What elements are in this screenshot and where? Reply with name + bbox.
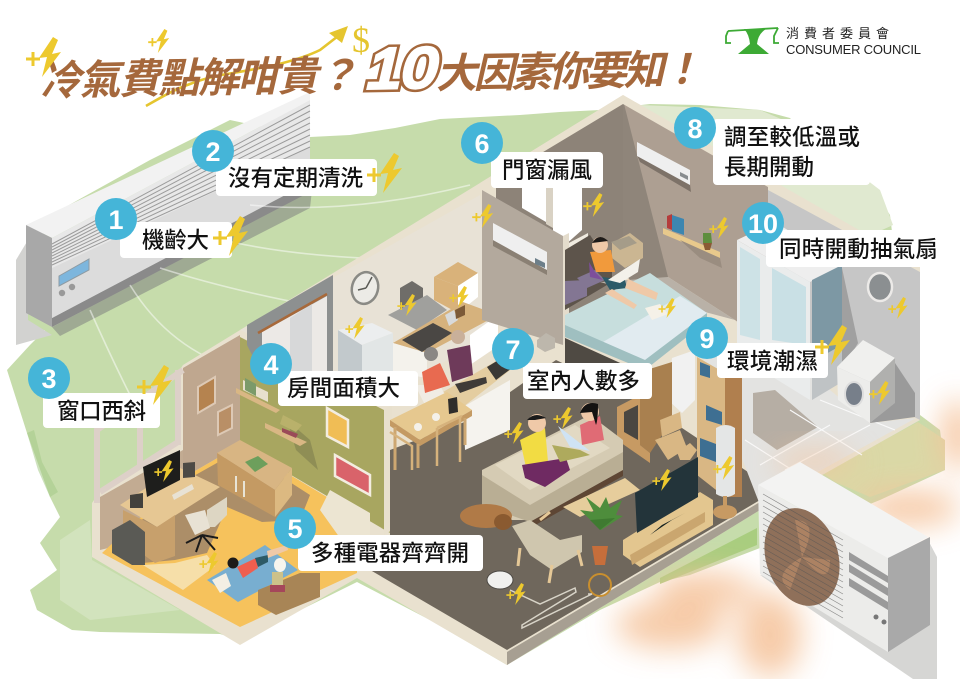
small air conditioners on bedroom walls — [493, 142, 691, 275]
title rising arrow and dollar sign: $ — [352, 20, 370, 60]
factor 8 label — [674, 107, 870, 185]
armchair — [512, 512, 582, 583]
factor 7 label: 7 — [505, 335, 521, 365]
title: 10 — [361, 37, 445, 101]
factor 5 label — [274, 507, 483, 571]
factor 4 label — [250, 343, 418, 406]
factor 8 label: 長期開動 — [724, 155, 814, 180]
factor 7 label — [492, 328, 652, 399]
kitchen dining table and couple — [390, 330, 487, 470]
kitchen window and appliances — [247, 262, 498, 378]
lightning icons — [26, 29, 908, 605]
factor 6 label: 門窗漏風 — [502, 158, 592, 183]
sofa with couple using devices — [482, 403, 623, 528]
consumer council logo — [726, 26, 921, 57]
room: study walls and window — [97, 335, 392, 627]
title rising arrow and dollar sign — [146, 20, 370, 106]
dog on the floor — [460, 504, 512, 530]
factor 3 label — [28, 357, 160, 428]
title: 大因素你要知！ — [434, 46, 711, 97]
bathroom — [668, 190, 920, 505]
haze over bathroom floor — [773, 448, 857, 476]
factor 9 label — [686, 317, 828, 378]
wall frames and shelves in study — [198, 377, 370, 495]
robot vacuum and cable — [487, 571, 592, 628]
wall outlet — [537, 333, 555, 352]
factor 8 label: 調至較低溫或 — [724, 125, 860, 150]
factor 5 label: 5 — [287, 514, 303, 544]
tv on cabinet — [623, 457, 713, 567]
coffee table — [563, 478, 640, 517]
house shell — [92, 95, 920, 665]
outdoor air conditioner unit — [752, 462, 937, 679]
bedroom shelf — [663, 214, 722, 268]
factor 5 label: 多種電器齊齊開 — [311, 541, 469, 566]
study furniture — [112, 440, 370, 615]
large indoor air conditioner — [16, 92, 312, 345]
main floor and kitchen counter — [365, 350, 760, 650]
factor 1 label: 1 — [108, 205, 124, 235]
title — [38, 20, 711, 106]
potted palm and stand — [580, 497, 623, 596]
bed with man and laptop — [565, 233, 735, 382]
factor 6 label — [461, 122, 603, 188]
bedroom walls — [480, 95, 920, 345]
orange hot air haze — [615, 399, 960, 677]
factor 10 label: 10 — [748, 209, 778, 239]
factor 10 label — [742, 202, 940, 267]
factor 2 label — [192, 130, 377, 196]
consumer council logo: CONSUMER COUNCIL — [786, 42, 921, 57]
factor 3 label: 3 — [41, 364, 57, 394]
cool air rays — [90, 185, 470, 470]
factor 6 label: 6 — [474, 129, 490, 159]
factor 3 label: 窗口西斜 — [57, 399, 146, 424]
factor 4 label: 房間面積大 — [287, 376, 400, 401]
consumer council logo: 消費者委員會 — [786, 26, 894, 41]
factor 1 label: 機齡大 — [142, 228, 209, 253]
factor 2 label: 沒有定期清洗 — [228, 166, 363, 191]
factor 10 label: 同時開動抽氣扇 — [779, 237, 938, 262]
factor 2 label: 2 — [205, 137, 221, 167]
title: 10 — [361, 37, 445, 101]
factor 9 label: 環境潮濕 — [727, 349, 818, 374]
living room shelves and floor lamp — [617, 357, 742, 519]
factor 1 label — [95, 198, 232, 258]
factor 9 label: 9 — [699, 324, 715, 354]
factor 7 label: 室內人數多 — [527, 369, 640, 394]
factor 4 label: 4 — [263, 350, 279, 380]
factor 8 label: 8 — [687, 114, 703, 144]
title: 冷氣費點解咁貴？ — [38, 52, 367, 104]
